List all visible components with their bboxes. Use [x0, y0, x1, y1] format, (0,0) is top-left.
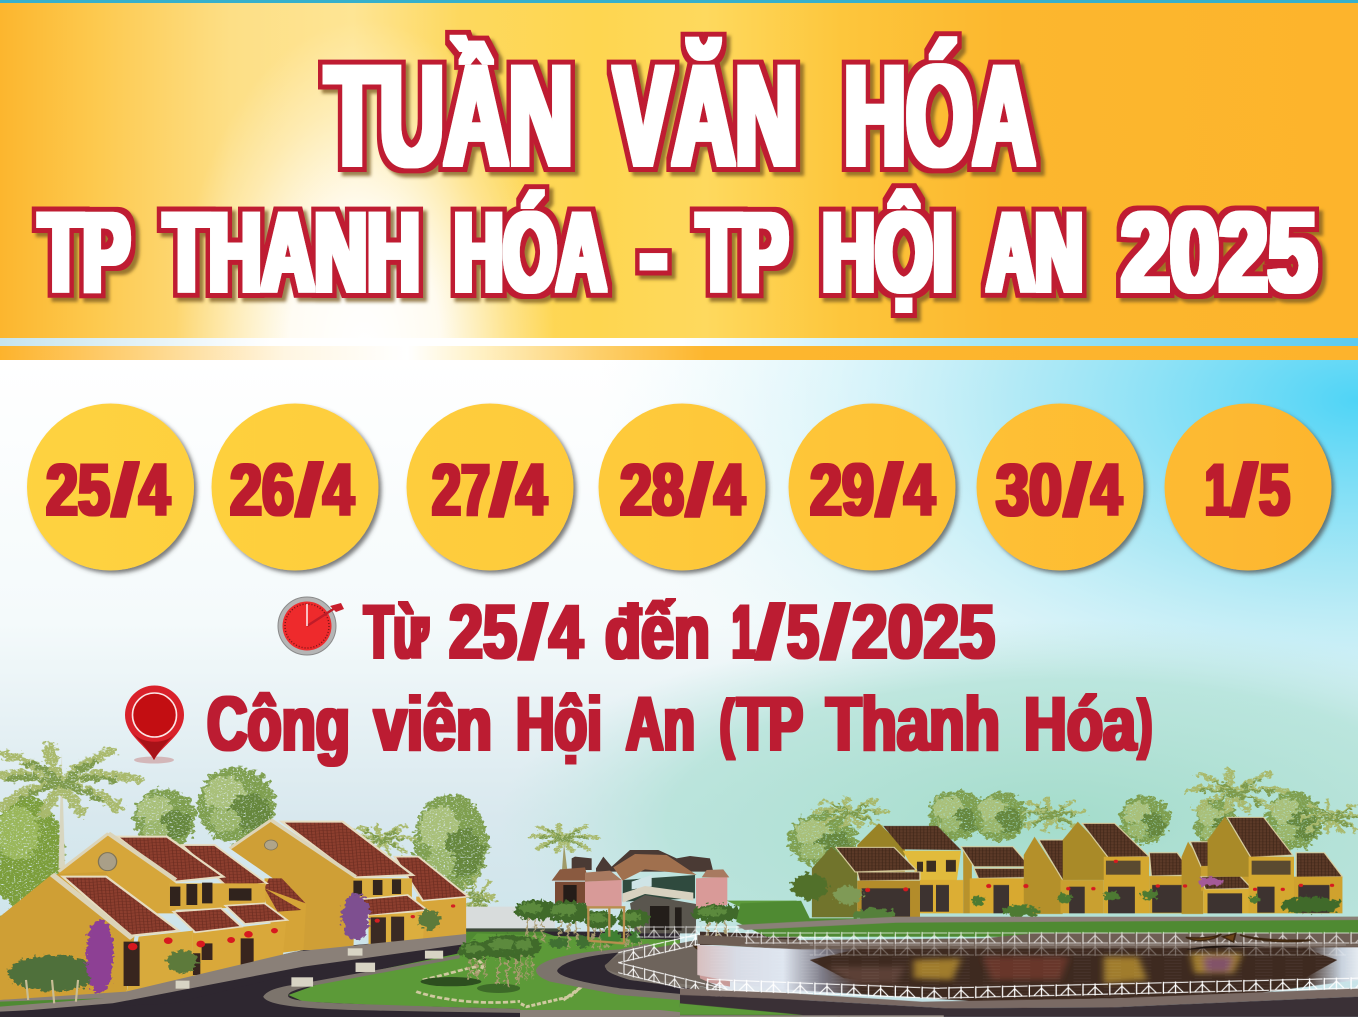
grass behind lawn — [460, 932, 680, 967]
curved road — [536, 943, 840, 1017]
venue text: Hội — [516, 682, 602, 767]
badge 26/4: 26 — [230, 450, 294, 531]
title line 1: TUẦN — [325, 37, 573, 196]
venue text: TP — [737, 682, 803, 767]
big house right — [230, 820, 468, 950]
badge 26/4: 4 — [323, 450, 354, 531]
far lawn — [736, 901, 1358, 937]
scene: covered bridge and curved road — [512, 824, 840, 1017]
badge 29/4: / — [875, 450, 903, 531]
badge 1/5: / — [1230, 450, 1258, 531]
badge 26/4 — [212, 404, 378, 570]
shrubs and bougainvillea — [9, 893, 543, 993]
badge 25/4: / — [111, 450, 139, 531]
front house — [0, 872, 193, 1000]
date range text: 2025 — [852, 590, 995, 675]
badge 28/4 — [598, 404, 766, 570]
badge 29/4 — [788, 404, 956, 570]
trees behind houses — [0, 767, 488, 937]
date range text: / — [518, 590, 548, 675]
lawn — [520, 947, 803, 1017]
badge 25/4: 4 — [139, 450, 170, 531]
title line 2: AN — [987, 190, 1083, 315]
badge 30/4 — [976, 404, 1144, 570]
venue text: ) — [1138, 686, 1152, 760]
title line 2: - — [640, 190, 667, 315]
upper railing — [745, 932, 1358, 944]
badge 28/4: / — [685, 450, 713, 531]
right pavilion — [696, 869, 729, 909]
boats — [1186, 933, 1311, 950]
venue text: ( — [720, 686, 734, 760]
scene: right houses and pond — [680, 770, 1358, 1017]
venue text: Công — [207, 682, 350, 767]
house row — [812, 817, 1342, 917]
red lanterns — [128, 928, 278, 950]
title line 1: HÓA — [844, 37, 1035, 196]
title line 2: HỘI — [822, 190, 953, 315]
far embankment — [700, 932, 798, 948]
badge 27/4: 4 — [516, 450, 547, 531]
badge 1/5: 1 — [1205, 450, 1230, 531]
date range text: đến — [605, 590, 710, 675]
title line 2: TP — [39, 190, 130, 315]
small boat — [694, 946, 775, 956]
venue text: viên — [374, 682, 492, 767]
near bank — [680, 988, 1358, 1008]
icon: clock — [278, 597, 344, 655]
benches — [176, 948, 443, 989]
date range text: / — [820, 590, 850, 675]
scene: left houses and park — [0, 746, 680, 1017]
badge 29/4: 29 — [810, 450, 874, 531]
date range text — [364, 590, 995, 675]
badge 27/4: 27 — [432, 450, 490, 531]
pond — [697, 944, 1358, 1003]
date range text: 5 — [787, 590, 819, 675]
title line 2: TP — [697, 190, 788, 315]
title line 2 — [39, 190, 1317, 315]
badge 30/4: 30 — [996, 450, 1062, 531]
badge 1/5: 5 — [1259, 450, 1290, 531]
bridge battlements — [572, 850, 713, 872]
white railings — [618, 926, 840, 1000]
sky background — [0, 360, 1358, 1017]
title — [39, 37, 1317, 315]
bridge side palms — [512, 900, 741, 980]
title line 1 — [325, 37, 1035, 196]
distant bridge — [464, 907, 555, 928]
palm above bridge — [531, 824, 597, 870]
badge 1/5 — [1164, 404, 1332, 570]
date badges — [27, 404, 1332, 570]
badge 25/4: 25 — [46, 450, 110, 531]
title line 2: THANH — [164, 190, 420, 315]
icon: location pin — [125, 686, 184, 764]
title line 1: VĂN — [614, 37, 798, 196]
badge 25/4 — [27, 404, 194, 570]
near railing — [706, 977, 1358, 999]
pergola — [587, 907, 625, 943]
title line 2: HÓA — [454, 190, 606, 315]
date range text: 1 — [732, 590, 755, 675]
middle house — [59, 833, 306, 977]
centre hall — [613, 854, 697, 933]
badge 28/4: 4 — [714, 450, 745, 531]
date range text: Từ — [364, 590, 429, 675]
trees behind row — [788, 770, 1358, 867]
date range text: / — [755, 590, 785, 675]
badge 27/4 — [406, 404, 574, 570]
garden trees — [792, 873, 1342, 922]
badge 29/4: 4 — [904, 450, 935, 531]
venue text: An — [626, 682, 695, 767]
date range text: 4 — [549, 590, 583, 675]
badge 27/4: / — [489, 450, 517, 531]
header banner — [0, 0, 1358, 360]
badge 30/4: 4 — [1091, 450, 1122, 531]
pond behind rail — [687, 945, 840, 993]
walkway — [736, 917, 1358, 930]
ground base — [0, 932, 680, 1017]
venue text — [207, 682, 1152, 767]
venue text: Thanh — [826, 682, 1000, 767]
badge 26/4: / — [295, 450, 323, 531]
venue text: Hóa — [1024, 682, 1137, 767]
red lanterns — [865, 860, 1334, 892]
left pavilion — [552, 867, 622, 907]
badge 28/4: 28 — [620, 450, 684, 531]
embankment — [697, 933, 1358, 950]
ground: road and lawn — [0, 933, 680, 1017]
date range text: 25 — [449, 590, 517, 675]
badge 30/4: / — [1063, 450, 1091, 531]
